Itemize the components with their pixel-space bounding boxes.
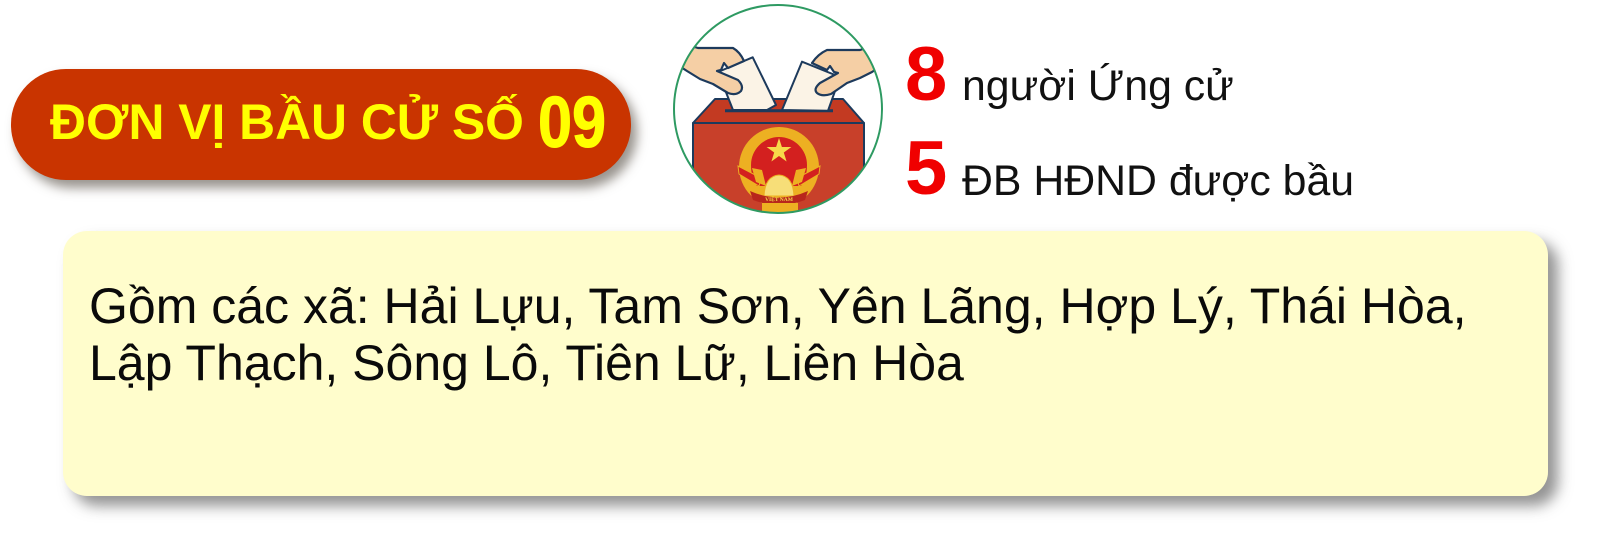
unit number 09: 09 [538, 83, 606, 163]
stat: 5 deputies elected [905, 126, 1354, 211]
commune list text [89, 278, 1467, 391]
right hand [810, 48, 874, 96]
panel: list of communes [63, 231, 1548, 496]
right ballot [782, 62, 840, 111]
commune list text: Lập Thạch, Sông Lô, Tiên Lữ, Liên Hòa [89, 335, 964, 391]
title pill: electoral unit 09 [11, 69, 631, 180]
ballot box [693, 99, 864, 223]
label: candidates: người Ứng cử [962, 62, 1234, 110]
commune list text: Gồm các xã: Hải Lựu, Tam Sơn, Yên Lãng, Hợp Lý, Thái Hòa, [89, 278, 1467, 334]
national emblem: VIỆT NAM [765, 195, 794, 203]
number 8: 8 [905, 32, 947, 117]
stat: 8 candidates [905, 32, 1234, 117]
heading text: ĐƠN VỊ BẦU CỬ SỐ [50, 94, 524, 150]
number 5: 5 [905, 126, 947, 211]
label: deputies elected: ĐB HĐND được bầu [962, 157, 1354, 205]
left ballot [718, 57, 776, 110]
national emblem [738, 127, 820, 215]
icon: ballot box in a green circle [673, 4, 883, 214]
left hand [682, 46, 745, 96]
